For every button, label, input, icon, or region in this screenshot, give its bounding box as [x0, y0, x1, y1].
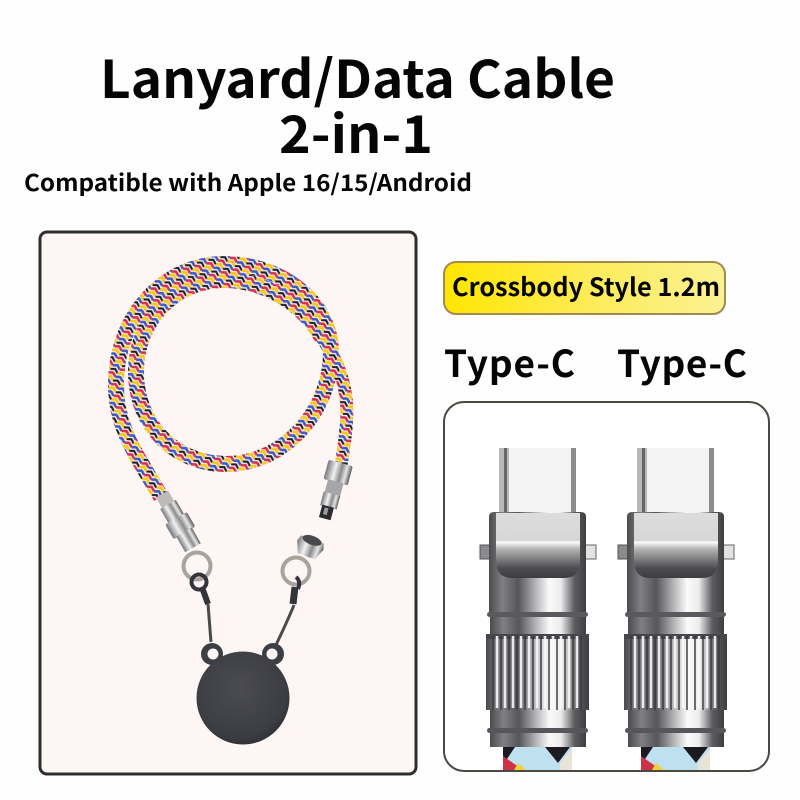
connector: right [618, 448, 734, 770]
metal cup [293, 531, 327, 561]
label: right Type-C: Type-C [617, 334, 747, 388]
title: Lanyard/Data Cable [100, 38, 615, 113]
metal connector right [314, 460, 353, 522]
title: 2-in-1 [279, 93, 433, 168]
braided rope [116, 264, 347, 497]
panel: lanyard photo [40, 232, 416, 774]
pendant [196, 643, 290, 744]
connector: left [480, 448, 596, 770]
subtitle: compatibility: Compatible with Apple 16/15/Android [24, 164, 472, 198]
label: left Type-C: Type-C [444, 334, 575, 388]
badge: crossbody length [444, 262, 725, 314]
black cords [192, 574, 299, 645]
badge: crossbody length: Crossbody Style 1.2m [452, 268, 720, 304]
title [100, 38, 615, 168]
silver rings [184, 552, 310, 584]
metal connector left [151, 488, 204, 554]
panel: connectors [444, 402, 769, 771]
